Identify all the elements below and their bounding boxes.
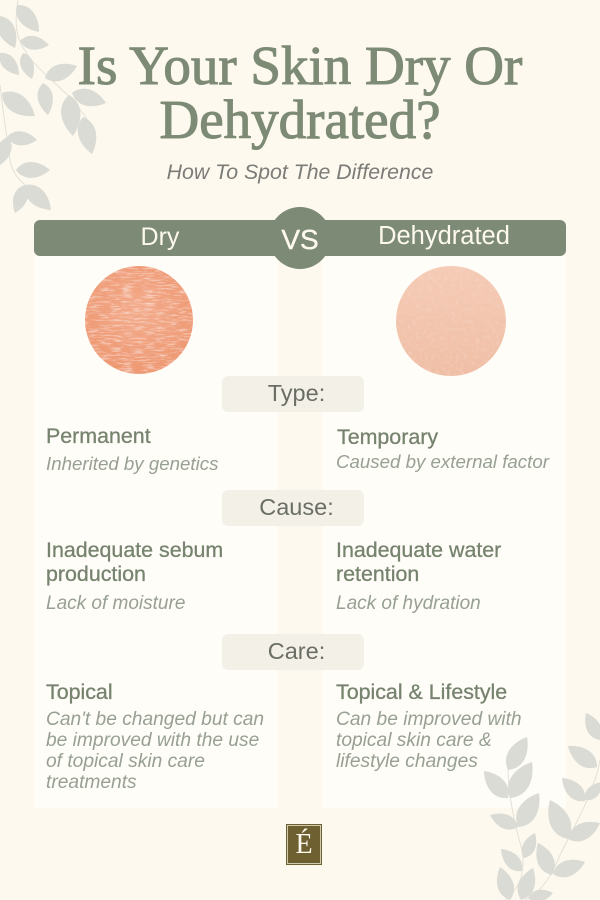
text: dehydrated cause: retention (336, 562, 419, 586)
header bar (34, 220, 566, 256)
text: dry care: of topical skin care (46, 751, 205, 772)
title: Is Your Skin Dry Or (78, 35, 522, 96)
text: dry cause: production (46, 562, 146, 586)
label: Type (222, 376, 364, 412)
text: dry care: Topical (46, 680, 113, 704)
heading: Dry: Dry (141, 223, 179, 251)
leaves: bottom right spray (478, 710, 600, 900)
heading: VS: VS (281, 224, 319, 255)
image: dry skin (85, 266, 193, 374)
VS badge (269, 207, 331, 269)
leaves: top left spray (0, 0, 108, 216)
logo: É (295, 829, 313, 860)
text: dry cause: Lack of moisture (46, 593, 185, 614)
text: dehydrated care (336, 680, 522, 772)
title: Dehydrated? (160, 88, 440, 150)
text: dehydrated cause: Lack of hydration (336, 593, 481, 614)
text: dry care: be improved with the use (46, 730, 259, 751)
label: Care (222, 634, 364, 670)
heading: Dehydrated: Dehydrated (378, 222, 510, 250)
text: dry cause: Inadequate sebum (46, 538, 223, 562)
subtitle: How To Spot The Difference (167, 160, 433, 184)
label: Care: Care: (268, 638, 325, 664)
text: dehydrated care: Can be improved with (336, 709, 522, 730)
title (78, 35, 522, 150)
text: dehydrated type: Caused by external factor (336, 451, 549, 472)
text: dehydrated care: lifestyle changes (336, 751, 478, 772)
text: dry type: Permanent (46, 424, 151, 448)
label: Cause: Cause: (259, 494, 334, 520)
text: dehydrated type (336, 425, 550, 472)
panel: dehydrated column (322, 256, 566, 808)
text: dehydrated care: Topical & Lifestyle (336, 680, 507, 704)
image: dehydrated skin (396, 266, 506, 376)
text: dehydrated cause: Inadequate water (336, 538, 501, 562)
text: dry type: Inherited by genetics (46, 453, 218, 474)
panel: dry column (34, 256, 278, 808)
text: dry care: treatments (46, 772, 137, 793)
text: dehydrated care: topical skin care & (336, 730, 492, 751)
label: Cause (222, 490, 364, 526)
text: dry cause (46, 538, 223, 614)
text: dehydrated type: Temporary (337, 425, 438, 449)
text: dehydrated cause (336, 538, 502, 614)
logo (286, 824, 322, 865)
label: Type: Type: (268, 380, 325, 406)
text: dry care: Can't be changed but can (46, 709, 264, 730)
text: dry care (46, 680, 264, 793)
text: dry type (46, 424, 218, 474)
